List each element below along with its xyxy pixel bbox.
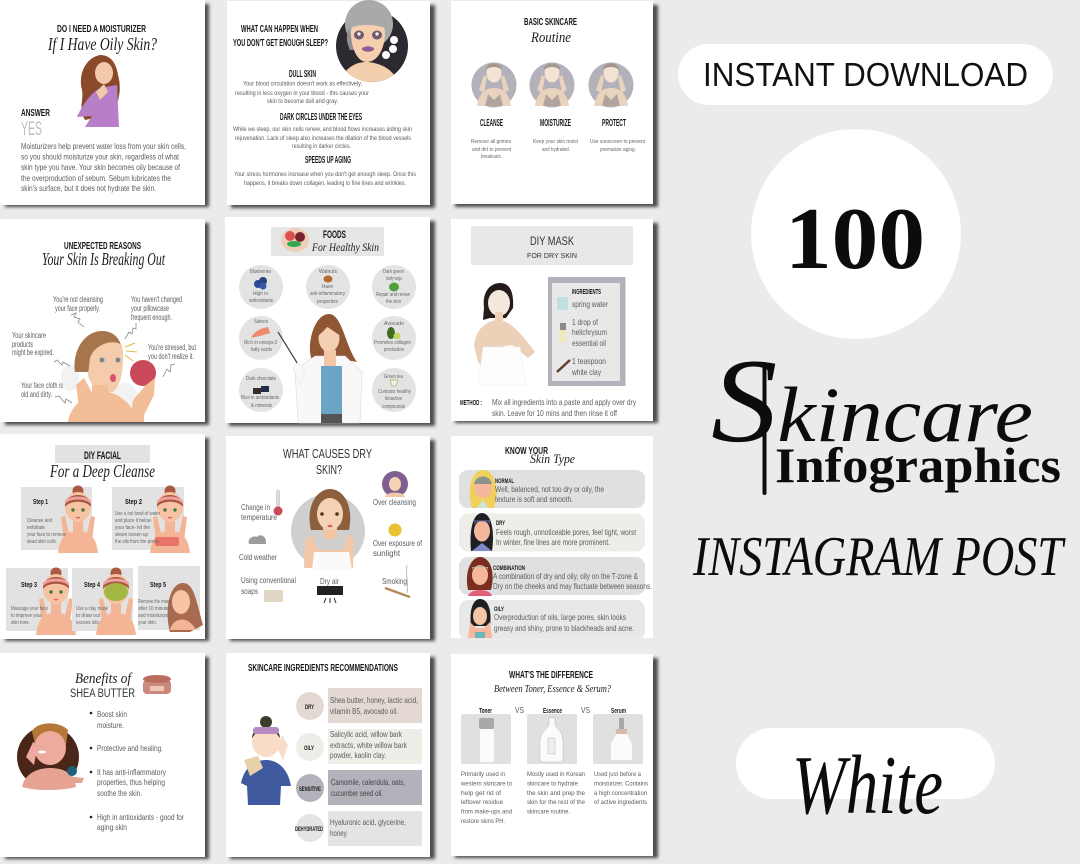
reason labels: you don't realize it. (148, 352, 194, 361)
row: dry: vitamin B5, avocado oil. (330, 707, 398, 716)
row: dehydrated: DEHYDRATED (295, 826, 323, 833)
causes: left (239, 490, 296, 602)
heading: dry skin causes: WHAT CAUSES DRY (283, 446, 372, 461)
food: walnuts (306, 265, 350, 309)
row: oily: OILY (494, 606, 504, 613)
benefit list (90, 710, 184, 832)
step 5: and moisturize (138, 613, 168, 619)
benefit list: aging skin (97, 823, 127, 832)
heading: foods (271, 227, 384, 256)
dry air conditioner: Dry air (320, 576, 339, 586)
heading: routine: BASIC SKINCARE (524, 16, 577, 28)
badge: 100: 100 (785, 191, 925, 288)
benefit list: properties, thus helping (97, 778, 165, 787)
section: dull skin: resulting in less oxygen in your blood - this causes your (235, 90, 370, 97)
row: sensitive: SENSITIVE (299, 786, 321, 793)
pill: instant download (678, 44, 1053, 105)
step 4: Step 4 (84, 580, 101, 589)
food: blueberries: High in (253, 291, 268, 297)
panel: toner essence serum (451, 654, 658, 858)
column: toner: leftover residue (461, 799, 503, 806)
benefit list: Boost skin (97, 710, 127, 719)
column: serum: of active ingredients (594, 799, 647, 806)
answer (21, 107, 50, 140)
column: serum: moisturizer. Contains (594, 780, 648, 788)
heading: shea butter: SHEA BUTTER (70, 686, 135, 700)
food: salmon: Salmon (254, 319, 268, 325)
section: speeds up aging: Your stress hormones increase when you don't get enough sleep. Once this (234, 171, 416, 178)
column: serum (593, 708, 648, 806)
ingredients box: INGREDIENTS (572, 287, 601, 296)
step 3: Massage your face (11, 606, 48, 612)
column: toner: Toner (479, 708, 492, 715)
title: skincare infographics: Skincare (711, 334, 1033, 467)
row: sensitive: Camomile, calendula, oats, (331, 778, 405, 787)
heading: DIY mask (471, 226, 633, 265)
column: toner: from make-ups and (461, 808, 512, 816)
food: walnuts: Have (322, 284, 333, 290)
panel: DIY facial (0, 434, 209, 641)
step 4: excess oils. (76, 620, 100, 626)
section: dark circles: DARK CIRCLES UNDER THE EYES (280, 111, 362, 123)
heading: DIY facial (49, 445, 155, 481)
step 5: your skin. (138, 620, 157, 626)
column: essence: the skin and prep the (527, 790, 585, 797)
causes: right: Over exposure of (373, 538, 423, 548)
section: dark circles: While we sleep, our skin cells renew, and blood flows increases aiding skin (233, 126, 412, 133)
step 2: steam loosen up (115, 532, 148, 538)
food: blueberries: antioxidants (249, 298, 273, 304)
body text: Moisturizers help prevent water loss from your skin cells, (21, 141, 186, 151)
food: walnuts: anti-inflammatory (310, 291, 345, 297)
causes: left: temperature (241, 512, 277, 522)
pill: instant download: INSTANT DOWNLOAD (703, 56, 1028, 93)
section: speeds up aging: happens, it breaks down collagen, leading to fine lines and wrinkles. (244, 180, 406, 187)
heading: DIY mask: FOR DRY SKIN (527, 251, 577, 260)
step 4: to draw out (76, 613, 100, 619)
pill: white (736, 728, 995, 832)
column: essence: skincare to hydrate (527, 780, 578, 788)
heading: skin type (505, 445, 575, 466)
heading: shea butter: Benefits of (75, 671, 133, 687)
ingredients box: essential oil (572, 338, 606, 348)
heading: DIY facial: DIY FACIAL (84, 450, 121, 462)
heading: routine (524, 16, 577, 46)
row: oily: OILY (304, 745, 314, 752)
food: dark chocolate: & minerals (251, 403, 272, 409)
method: METHOD : (460, 400, 482, 407)
panel: lack of sleep (227, 0, 435, 208)
heading: DIY mask: DIY MASK (530, 234, 574, 248)
row: dry (296, 688, 422, 723)
row: combination: COMBINATION (493, 565, 525, 572)
panel: unexpected reasons (0, 219, 209, 425)
answer: YES (21, 119, 42, 140)
section: speeds up aging: SPEEDS UP AGING (305, 154, 351, 166)
ingredients box (548, 277, 626, 386)
reason labels: You're not cleansing (53, 295, 103, 304)
row: sensitive (296, 770, 422, 805)
column: essence: skin for the rest of the (527, 799, 585, 806)
step: cleanse: and dirt to prevent (472, 147, 511, 153)
row: oily: greasy and shiny, prone to blackheads and acne. (494, 623, 634, 633)
step 4 (72, 568, 136, 635)
body text: so you should moisturize your skin, regardless of what (21, 152, 180, 162)
heading: breakouts: UNEXPECTED REASONS (64, 240, 141, 252)
food: avocado (372, 316, 416, 360)
heading: breakouts (42, 240, 166, 269)
step 1: dead skin cells. (27, 539, 57, 545)
heading: dry skin causes: SKIN? (316, 462, 342, 477)
food: green tea: bioactive (385, 396, 402, 402)
step 3: skin tone. (11, 620, 30, 626)
column: toner (460, 708, 512, 825)
step 1: Cleanse and (27, 518, 52, 524)
row: oily: Overproduction of oils, large pores, skin looks (494, 612, 626, 622)
row: combination: Dry on the cheeks and may fluctuate between seasons. (493, 581, 652, 591)
row: dry: DRY (305, 704, 314, 711)
column: toner: restore skins PH. (461, 818, 505, 825)
step 2: Use a hot bowl of water (115, 511, 160, 517)
food: avocado: Avocado (384, 321, 404, 327)
reason labels: Your face cloth is (21, 381, 63, 390)
heading: sleep: WHAT CAN HAPPEN WHEN (241, 23, 318, 35)
panel: do I need a moisturizer (0, 0, 209, 207)
heading: sleep (233, 23, 328, 49)
food: avocado: Promotes collagen (374, 340, 411, 346)
reason labels (12, 295, 197, 399)
arrows: squiggles (54, 313, 175, 403)
food: dark green leafy vegs: the skin (386, 299, 401, 305)
icon: woman with long hair (77, 55, 120, 127)
reason labels: Your skincare (12, 331, 46, 340)
ingredients box: 1 drop of (572, 317, 599, 327)
food: blueberries: Blueberries (250, 269, 271, 275)
step 4: Use a clay mask (76, 606, 108, 612)
step 2: the oils from the pores. (115, 539, 160, 545)
step: moisturize (530, 62, 578, 153)
step 3 (6, 568, 76, 635)
separators: versus (515, 706, 590, 715)
benefit list: Protective and healing. (97, 744, 163, 753)
step 5: Step 5 (150, 580, 166, 589)
food: dark green leafy vegs: Dark green (383, 269, 404, 275)
row: oily: Salicylic acid, willow bark (330, 730, 402, 739)
separators: versus: VS (581, 706, 590, 715)
food: green tea (372, 368, 416, 412)
food: green tea: Contains healthy (378, 389, 411, 395)
heading: difference (494, 669, 611, 695)
row: dehydrated (295, 811, 422, 846)
panel: know your skin type (451, 436, 653, 640)
food: avocado: production (384, 347, 404, 353)
food: green tea: compounds (382, 404, 405, 410)
food: walnuts: Walnuts (319, 269, 337, 275)
heading: skin type: KNOW YOUR (505, 445, 548, 457)
food: dark green leafy vegs (372, 265, 416, 309)
separators: versus: VS (515, 706, 524, 715)
step: protect: Use sunscreen to prevent (590, 139, 645, 145)
row: dry: DRY (496, 520, 505, 527)
section: dull skin (235, 68, 370, 105)
reason labels: products (12, 340, 33, 349)
section: dark circles (233, 111, 412, 150)
body text: the overproduction of sebum. Sebum lubricates the (21, 173, 171, 183)
row: combination (459, 557, 652, 596)
icon: woman checking pimple (61, 331, 156, 422)
ingredients box: 1 teaspoon (572, 356, 606, 366)
panel: foods for healthy skin (225, 217, 435, 426)
dry air conditioner (317, 576, 343, 603)
step: cleanse: breakouts. (481, 154, 502, 160)
reason labels: You're stressed, but (148, 343, 197, 352)
step 3: Step 3 (21, 580, 37, 589)
pill: white: White (792, 739, 943, 832)
food: blueberries (239, 265, 283, 309)
step: cleanse (471, 62, 516, 160)
panel: benefits of shea butter (0, 653, 209, 859)
step 1: your face to remove (27, 532, 66, 538)
row: normal: NORMAL (495, 478, 514, 485)
ingredients box: helichrysum (572, 327, 607, 337)
row: oily: powder, kaolin clay. (330, 751, 386, 760)
method: Mix all ingredients into a paste and apply over dry (492, 397, 637, 407)
food: dark chocolate: Dark chocolate (246, 376, 276, 382)
column: essence (527, 708, 585, 816)
section: dark circles: resulting in darker circles. (292, 143, 351, 150)
reason labels: your face properly. (55, 304, 100, 313)
row: dry: Feels rough, unnoticeable pores, feel tight, worst (496, 527, 637, 537)
benefit list: moisture. (97, 721, 124, 730)
column: essence: Essence (543, 708, 562, 715)
step 2: your face- let the (115, 525, 150, 531)
icon: doctor with pointer (278, 314, 362, 423)
row: oily: extracts, white willow bark (330, 741, 407, 750)
causes: right: sunlight (373, 548, 401, 558)
step: protect (588, 62, 645, 153)
row: dehydrated: honey. (330, 829, 348, 838)
title: skincare infographics: Infographics (775, 437, 1061, 493)
section: dark circles: rejuvenation. Lack of sleep also increases the dilation of the blood vessels (235, 135, 411, 142)
section: dull skin: Your blood circulation doesn't work as effectively, (243, 80, 362, 88)
food: dark chocolate: Rice in antioxidants (241, 395, 279, 401)
food: dark green leafy vegs: Repair and renew (376, 292, 411, 298)
method: skin. Leave for 10 mins and then rinse it off (492, 408, 618, 418)
column: essence: Mostly used in Korean (527, 771, 585, 778)
column: serum: Serum (611, 708, 626, 715)
row: dry: In winter, fine lines are more prominent. (496, 537, 610, 547)
row: normal (459, 470, 645, 508)
benefit list: High in antioxidants - good for (97, 813, 184, 822)
step: cleanse: Remove all grimes (471, 139, 511, 145)
row: oily (296, 729, 422, 764)
step: protect: premature aging. (600, 147, 636, 153)
step: moisturize: MOISTURIZE (540, 117, 571, 129)
section: dull skin: DULL SKIN (289, 68, 316, 80)
row: dry: Shea butter, honey, lactic acid, (330, 696, 418, 705)
reason labels: You haven't changed (131, 295, 182, 304)
heading: breakouts: Your Skin Is Breaking Out (42, 249, 166, 269)
heading: ingredients: SKINCARE INGREDIENTS RECOMMENDATIONS (248, 662, 398, 674)
column: toner: help get rid of (461, 790, 501, 797)
icon: woman applying cream (17, 723, 84, 790)
causes: left: Cold weather (239, 552, 277, 562)
step 5: after 10 minutes (138, 606, 171, 612)
heading: moisturizer: DO I NEED A MOISTURIZER (57, 23, 146, 35)
step: moisturize: and hydrated. (542, 147, 570, 153)
row: dehydrated: Hyaluronic acid, glycerine, (330, 818, 406, 827)
step: protect: PROTECT (602, 117, 626, 129)
step 2: and place it below (115, 518, 152, 524)
panel: basic skincare routine (451, 1, 658, 207)
section: dull skin: skin to become dull and gray. (267, 98, 338, 105)
heading: skin type: Skin Type (530, 451, 575, 466)
causes: right: Smoking (382, 576, 407, 586)
food: salmon: Rich in omega-3 (244, 340, 277, 346)
row: oily (459, 599, 645, 640)
reason labels: might be expired. (12, 348, 54, 357)
column: toner: western skincare to (460, 780, 512, 788)
food: dark chocolate (239, 368, 283, 412)
reason labels: old and dirty. (21, 390, 52, 399)
reason labels: your pillowcase (131, 304, 169, 313)
reason labels: frequent enough. (131, 313, 172, 322)
row: normal: Well, balanced, not too dry or oily, the (495, 484, 604, 494)
badge: 100 (751, 129, 961, 339)
icon: tired aged woman (336, 0, 408, 82)
heading: shea butter (70, 671, 135, 700)
step 5: Remove the mask (138, 599, 171, 605)
column: serum: a high concentration (594, 790, 647, 797)
food: green tea: Green tea (384, 374, 404, 380)
heading: moisturizer (47, 23, 157, 54)
step 5 (138, 566, 203, 632)
method (460, 397, 637, 418)
row: dry (459, 513, 645, 552)
step 1 (21, 486, 98, 553)
step 1: Step 1 (33, 497, 48, 506)
causes: left: Change in (241, 502, 270, 512)
step 3: to improve your (11, 613, 42, 619)
causes: right: Over cleansing (373, 497, 416, 507)
column: essence: skincare routine. (527, 808, 570, 816)
step 2: Step 2 (125, 497, 142, 506)
causes: left: soaps (241, 586, 258, 596)
step 2 (112, 486, 190, 553)
heading: moisturizer: If I Have Oily Skin? (47, 34, 157, 54)
benefit list: soothe the skin. (97, 789, 142, 798)
icon: shea butter jar (143, 675, 171, 694)
icon: girl with headband (241, 716, 291, 805)
answer: ANSWER (21, 107, 50, 119)
food: dark green leafy vegs: leafy vegs (386, 276, 402, 282)
food: salmon: fatty acids (251, 347, 272, 353)
step: moisturize: Keep your skin moist (533, 139, 578, 145)
row: normal: texture is soft and smooth. (495, 494, 573, 504)
panel: DIY mask (451, 219, 658, 423)
row: combination: A combination of dry and oily, oily on the T-zone & (493, 571, 638, 581)
body text (21, 141, 186, 193)
ingredients box: spring water (572, 299, 608, 309)
ingredients box: white clay (571, 367, 602, 377)
column: toner: Primarily used in (461, 771, 505, 778)
causes: left: Using conventional (241, 575, 296, 585)
heading: routine: Routine (530, 30, 571, 46)
row: sensitive: cucumber seed oil. (331, 789, 383, 798)
heading: sleep: YOU DON'T GET ENOUGH SLEEP? (233, 37, 328, 49)
heading: dry skin causes (283, 446, 372, 477)
icon: woman with dry skin (291, 489, 365, 570)
section: speeds up aging (234, 154, 416, 187)
benefit list: It has anti-inflammatory (97, 768, 166, 777)
heading: foods: FOODS (323, 229, 346, 241)
step: cleanse: CLEANSE (480, 117, 503, 129)
step 1: exfoliate (27, 525, 45, 531)
panel: what causes dry skin (226, 436, 435, 641)
body text: skin's surface, but it does not hydrate the skin. (21, 183, 156, 193)
icon: woman in towel (474, 283, 535, 385)
heading: difference: Between Toner, Essence & Serum? (494, 684, 611, 695)
food: salmon (239, 316, 283, 360)
food: walnuts: properties (317, 299, 338, 305)
heading: foods: For Healthy Skin (311, 240, 379, 254)
column: serum: Used just before a (594, 771, 641, 778)
body text: skin type you have. Your skin becomes oily because of (21, 162, 181, 172)
causes: right (373, 471, 423, 597)
heading: difference: WHAT'S THE DIFFERENCE (509, 669, 593, 681)
panel: skincare ingredients recommendations (226, 653, 435, 859)
heading: DIY facial: For a Deep Cleanse (49, 461, 155, 481)
